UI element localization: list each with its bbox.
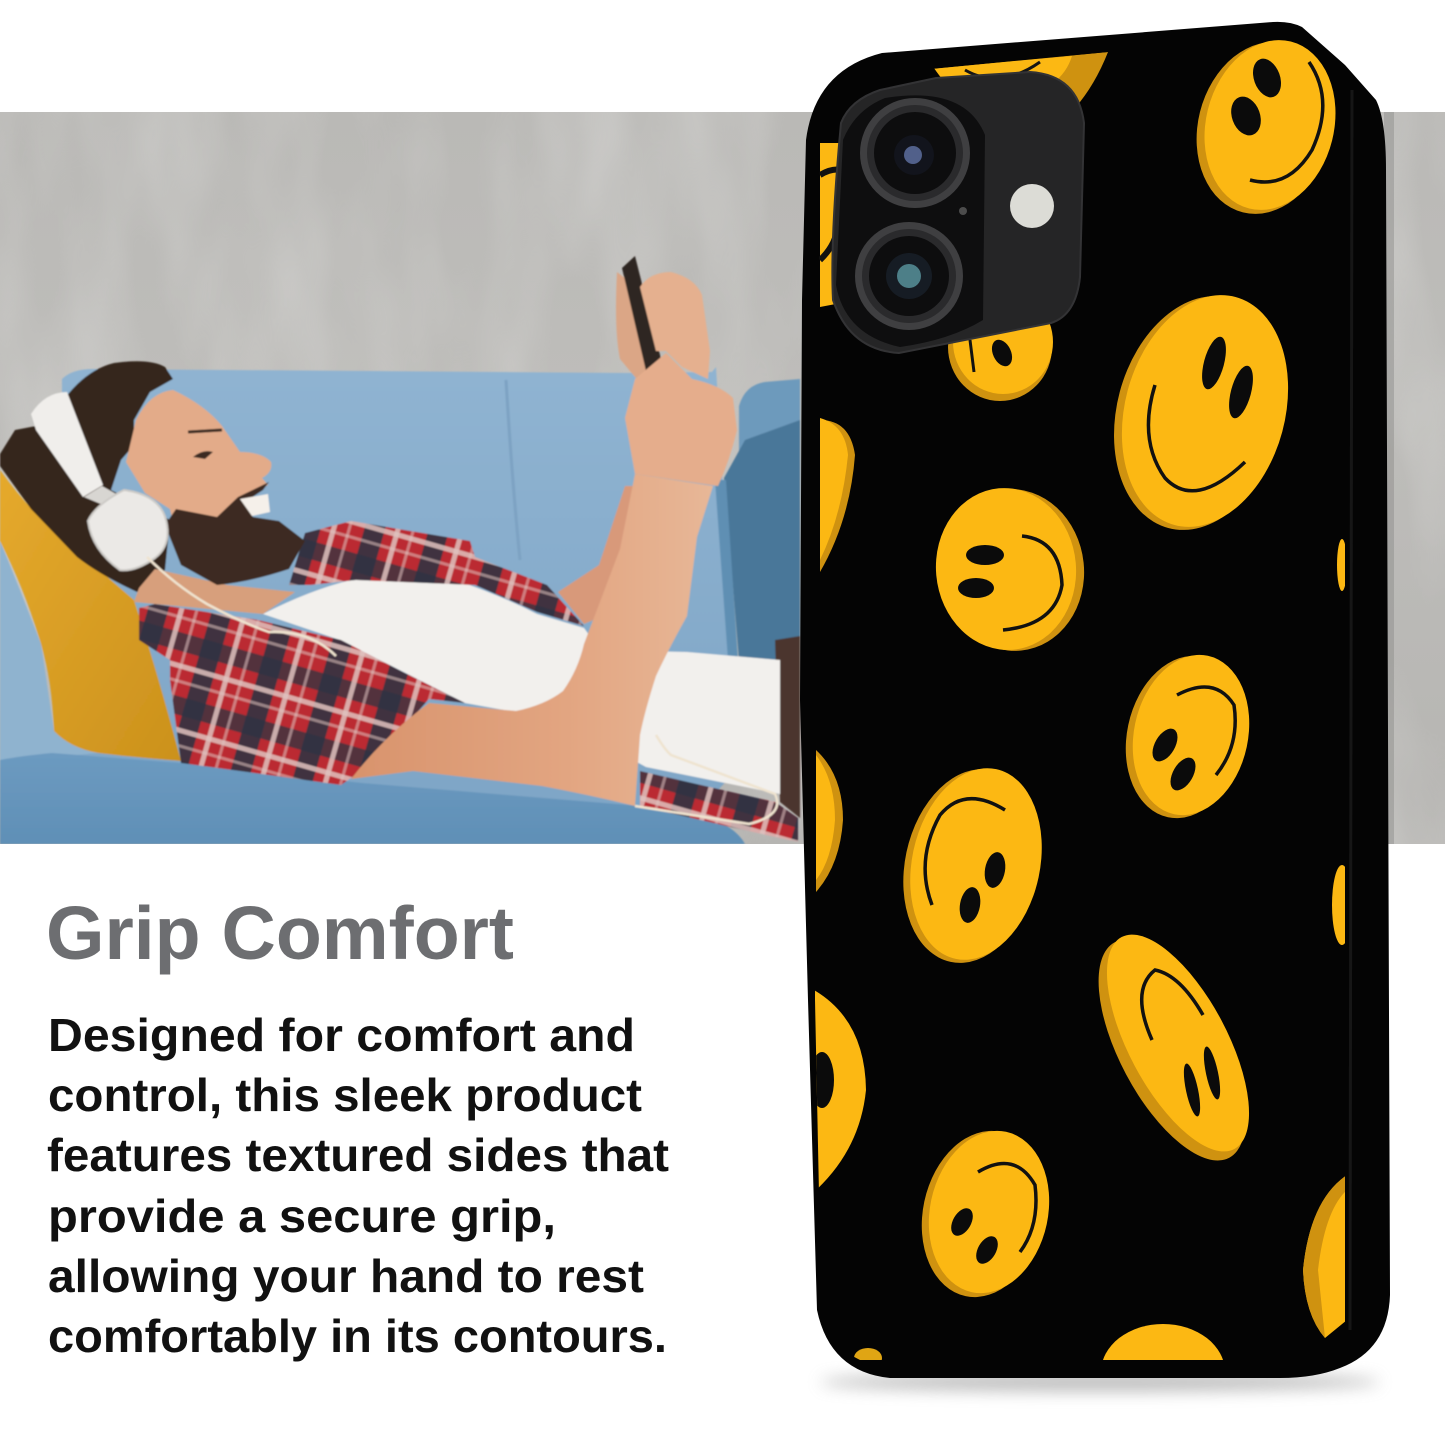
body text: control, this sleek product bbox=[48, 1069, 642, 1121]
trousers bbox=[775, 636, 800, 818]
body text: features textured sides that bbox=[47, 1129, 669, 1181]
smiley lower left bbox=[903, 768, 1042, 963]
camera island bbox=[832, 72, 1084, 353]
white t-shirt bbox=[263, 580, 780, 794]
neck bbox=[134, 569, 295, 614]
edge smileys bbox=[810, 143, 1352, 1420]
microphone dot bbox=[959, 207, 967, 215]
sofa bbox=[0, 367, 800, 844]
face bbox=[126, 390, 305, 585]
plaid shirt bbox=[139, 521, 798, 842]
yellow pillow bbox=[0, 470, 181, 761]
concrete wall background bbox=[0, 112, 1445, 844]
smiley print pattern bbox=[810, 26, 1353, 1420]
flash bbox=[1010, 184, 1054, 228]
smiley right middle bbox=[1126, 654, 1250, 818]
smiley tilted bbox=[1098, 934, 1250, 1160]
body text bbox=[47, 1009, 669, 1362]
arm and hand holding phone bbox=[351, 256, 737, 806]
case drop shadow bbox=[820, 1373, 1380, 1391]
body text: provide a secure grip, bbox=[48, 1190, 556, 1242]
smiley top right bbox=[1196, 40, 1336, 214]
body text: Designed for comfort and bbox=[48, 1009, 635, 1061]
body text: allowing your hand to rest bbox=[48, 1250, 644, 1302]
far forearm behind bbox=[558, 485, 634, 624]
smiley bottom bbox=[922, 1130, 1050, 1298]
side edge highlight bbox=[1350, 90, 1352, 1330]
lower lens bbox=[855, 222, 963, 330]
body text: comfortably in its contours. bbox=[48, 1310, 667, 1362]
lifestyle photo: man on sofa bbox=[0, 112, 1445, 844]
smiley under camera bbox=[948, 324, 1053, 401]
heading: Grip Comfort bbox=[46, 891, 514, 975]
smiley top partial bbox=[934, 52, 1108, 108]
headphones bbox=[31, 392, 168, 570]
upper lens bbox=[860, 98, 970, 208]
hair bbox=[0, 361, 173, 592]
phone with case bbox=[800, 22, 1390, 1420]
smiley middle bbox=[936, 488, 1084, 651]
camera recess bbox=[836, 95, 985, 347]
man and sofa scene bbox=[0, 256, 800, 844]
black case body bbox=[800, 22, 1390, 1378]
smiley big bbox=[1114, 295, 1288, 530]
earphone cable bbox=[147, 557, 777, 824]
